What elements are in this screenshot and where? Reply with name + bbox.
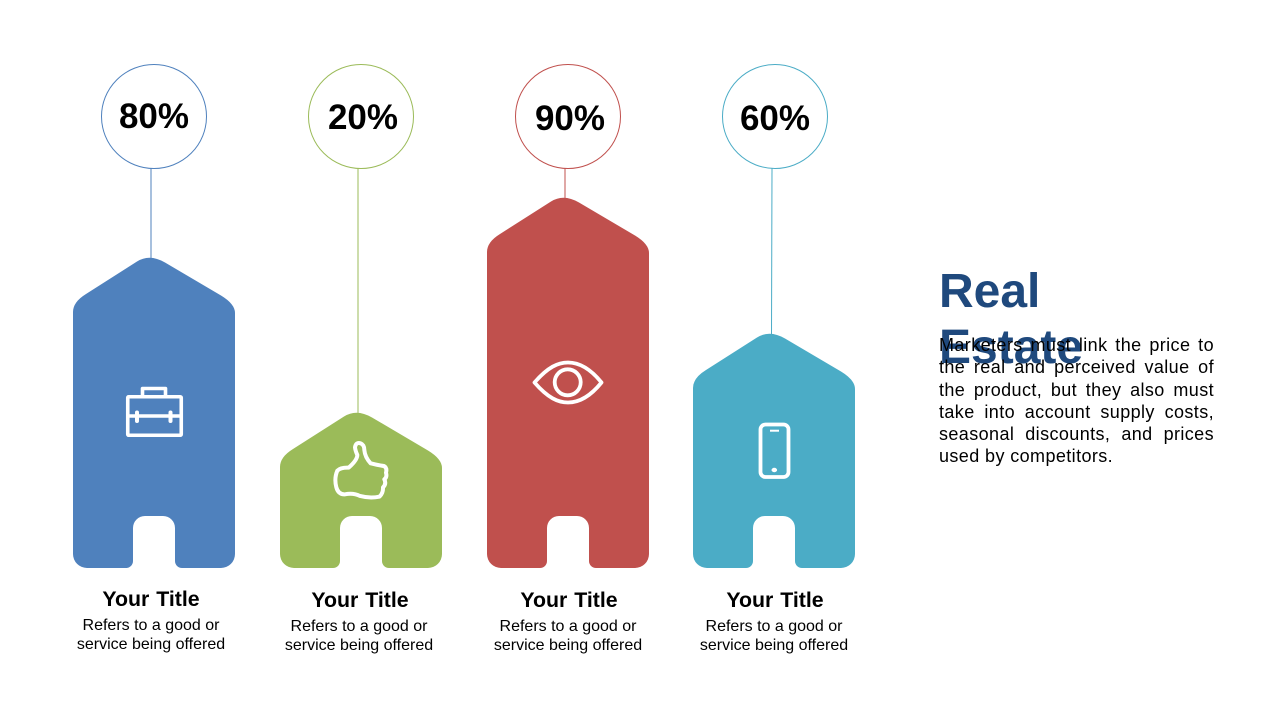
column 3: red house 90% (487, 64, 649, 654)
caption: Your Title (102, 587, 200, 611)
percentage circle 20%: 20% (328, 98, 398, 137)
connector line (150, 168, 152, 259)
house shape (693, 334, 855, 568)
caption (285, 588, 433, 654)
percentage circle 60% (722, 64, 828, 168)
caption: service being offered (285, 637, 433, 654)
column 4: teal house 60% (693, 64, 855, 654)
connector line (770, 168, 773, 335)
connector line (564, 168, 566, 199)
icon: smartphone (760, 424, 788, 477)
icon: eye (534, 362, 602, 402)
house shape (487, 198, 649, 568)
caption: service being offered (700, 637, 848, 654)
caption: service being offered (494, 637, 642, 654)
percentage circle 80%: 80% (119, 97, 189, 136)
caption: Refers to a good or (291, 618, 428, 635)
caption: Refers to a good or (83, 617, 220, 634)
caption: Refers to a good or (500, 618, 637, 635)
caption (700, 588, 848, 654)
percentage circle 20% (308, 64, 414, 168)
caption: Your Title (520, 588, 618, 612)
column 1: blue house 80% (73, 64, 235, 653)
connector line (357, 168, 359, 414)
percentage circle 90% (516, 64, 620, 168)
column 2: green house 20% (280, 64, 442, 654)
caption: Your Title (311, 588, 409, 612)
house shape (73, 258, 235, 568)
percentage circle 60%: 60% (740, 99, 810, 138)
icon: thumbs up (335, 443, 386, 498)
caption (494, 588, 642, 654)
icon: briefcase (128, 388, 181, 435)
caption: Refers to a good or (706, 618, 843, 635)
text block: pricing description: Marketers must link the price to the real and perceived value of the product, but they also must take into account supply costs, seasonal discounts, and prices used by competitors. (939, 335, 1214, 466)
percentage circle 80% (102, 64, 206, 168)
caption: Your Title (726, 588, 824, 612)
caption: service being offered (77, 636, 225, 653)
heading: Real Estate: Real Estate (939, 265, 1083, 374)
percentage circle 90%: 90% (535, 99, 605, 138)
house shape (280, 413, 442, 568)
caption (77, 587, 225, 653)
